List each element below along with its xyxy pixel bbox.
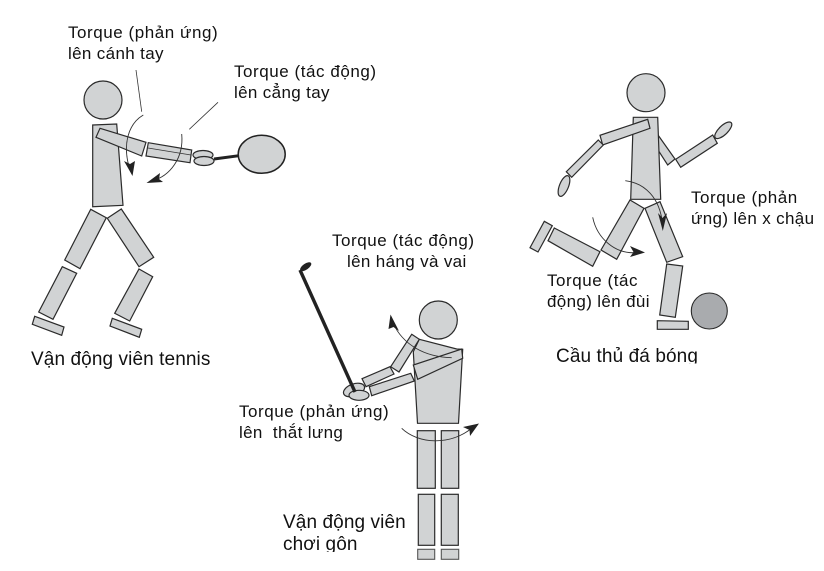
golf forearm one: [362, 367, 394, 387]
label: upper arm reaction torque: Torque (phản ứng): [68, 23, 218, 42]
golf head: [419, 301, 457, 339]
caption: tennis player: Vận động viên tennis: [31, 349, 210, 370]
caption: golfer: Vận động viên: [283, 512, 406, 533]
figure: golfer: [299, 261, 463, 559]
label: waist reaction torque: Torque (phản ứng): [239, 402, 389, 421]
tennis torso: [93, 124, 123, 207]
label: pelvis reaction torque: Torque (phản: [691, 188, 798, 207]
golf right foot: [441, 549, 459, 559]
soccer standing thigh: [645, 202, 683, 262]
soccer head: [627, 74, 665, 112]
soccer kicking shin: [548, 228, 600, 266]
figure: tennis player: [32, 81, 285, 337]
golf left shin: [418, 494, 435, 545]
tennis left thigh: [65, 209, 106, 269]
label: forearm action torque: Torque (tác động): [234, 62, 377, 81]
tennis racquet: [214, 135, 285, 173]
arrow: upper arm reaction torque: [124, 115, 143, 176]
soccer ball: [691, 293, 727, 329]
leader line: upper arm torque: [136, 70, 142, 112]
golf front upper arm: [413, 349, 463, 379]
soccer back hand: [712, 119, 734, 141]
label: upper arm reaction torque: lên cánh tay: [68, 44, 164, 63]
golf left thigh: [417, 431, 435, 488]
label: forearm action torque: lên cẳng tay: [234, 83, 330, 102]
soccer back forearm: [676, 135, 717, 167]
golf club: [299, 261, 355, 392]
label: pelvis reaction torque: ứng) lên x chậu: [691, 209, 814, 228]
label: thigh action torque: Torque (tác: [547, 271, 638, 290]
tennis left foot: [32, 316, 64, 335]
label: waist reaction torque: lên thắt lưng: [239, 423, 343, 442]
soccer front hand: [556, 174, 572, 198]
tennis right shin: [115, 269, 153, 321]
soccer kicking foot: [530, 221, 552, 252]
soccer standing foot: [657, 321, 688, 329]
tennis forearm: [146, 143, 192, 163]
figure: soccer player: [530, 74, 734, 329]
golf forearm two: [369, 373, 414, 396]
golf left foot: [418, 549, 435, 559]
tennis right thigh: [107, 209, 154, 267]
soccer front forearm: [566, 140, 603, 177]
label: thigh action torque: động) lên đùi: [547, 292, 650, 311]
soccer standing shin: [660, 264, 683, 317]
caption: golfer: chơi gôn: [283, 534, 358, 555]
caption: soccer player: Cầu thủ đá bóng: [556, 346, 698, 367]
golf right thigh: [441, 431, 459, 488]
arrow: thigh action torque: [593, 217, 645, 257]
soccer torso: [631, 117, 661, 199]
arrow: hip and shoulder action torque: [388, 314, 452, 358]
soccer kicking thigh: [601, 200, 644, 259]
golf torso: [413, 339, 463, 423]
arrow: forearm action torque: [146, 134, 182, 183]
soccer front upper arm: [600, 119, 650, 145]
tennis left shin: [39, 267, 77, 319]
clip of golfer caption descenders: [280, 552, 370, 560]
tennis hand: [193, 150, 214, 166]
golf right shin: [441, 494, 458, 545]
arrow: pelvis reaction torque: [625, 181, 667, 231]
label: hip and shoulder action torque: Torque (tác động): [332, 231, 475, 250]
golf hands: [342, 381, 369, 400]
tennis upper arm: [96, 128, 146, 156]
label: hip and shoulder line two: lên háng và vai: [347, 252, 467, 271]
leader line: forearm torque: [189, 102, 218, 129]
golf back upper arm: [391, 334, 419, 372]
arrow: waist reaction torque: [402, 424, 479, 441]
soccer back upper arm: [658, 135, 675, 165]
clip of caption descenders: [550, 364, 710, 372]
tennis right foot: [110, 318, 142, 337]
tennis head: [84, 81, 122, 119]
